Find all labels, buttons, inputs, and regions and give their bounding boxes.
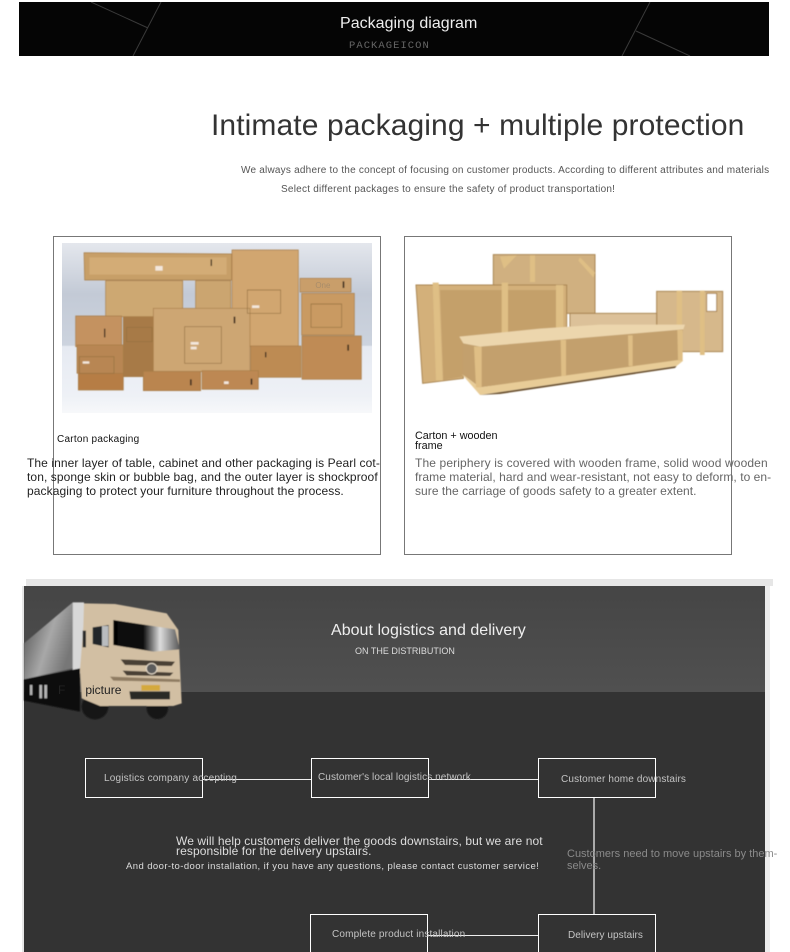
body text: carton packaging: ton, sponge skin or bubble bag, and the outer layer is shockproof <box>27 470 378 484</box>
image: carton boxes <box>62 243 372 412</box>
connector: second to third <box>428 779 538 780</box>
image: wooden crates <box>414 253 724 396</box>
label: carton packaging: Carton packaging <box>57 434 139 445</box>
step: local network <box>311 758 428 798</box>
logistics heading: About logistics and delivery <box>331 622 526 639</box>
panel: carton plus wooden frame <box>404 236 732 555</box>
upstairs note: selves. <box>567 860 601 872</box>
body text: carton plus wooden: sure the carriage of goods safety to a greater extent. <box>415 484 697 498</box>
upstairs note <box>567 848 777 872</box>
label: carton plus wooden: Carton + wooden <box>415 430 498 442</box>
panel: logistics and delivery <box>22 579 773 952</box>
panel: carton packaging <box>53 236 381 555</box>
main heading: Intimate packaging + multiple protection <box>211 109 744 142</box>
label: carton plus wooden <box>415 430 498 452</box>
step label: complete installation: Complete product installation <box>332 929 465 940</box>
image: delivery truck <box>23 602 182 720</box>
installation note: And door-to-door installation, if you have any questions, please contact customer service! <box>126 861 539 872</box>
delivery note: We will help customers deliver the goods downstairs, but we are not <box>176 834 543 848</box>
connector: first to second <box>202 779 311 780</box>
connector: third to fourth <box>593 798 595 914</box>
banner subtitle: PACKAGEICON <box>349 40 430 52</box>
connector: fourth to fifth <box>428 935 538 936</box>
delivery note: responsible for the delivery upstairs. <box>176 844 372 858</box>
step label: home downstairs: Customer home downstairs <box>561 774 686 785</box>
body text: carton plus wooden <box>415 456 771 498</box>
intro line two: Select different packages to ensure the safety of product transportation! <box>281 184 615 195</box>
step: home downstairs <box>538 758 656 798</box>
body text: carton packaging: packaging to protect your furniture throughout the process. <box>27 484 344 498</box>
step label: logistics company: Logistics company accepting <box>104 773 237 784</box>
label: carton plus wooden: frame <box>415 440 443 452</box>
body text: carton plus wooden: frame material, hard and wear-resistant, not easy to deform, to en- <box>415 470 771 484</box>
step label: delivery upstairs: Delivery upstairs <box>568 930 643 941</box>
body text: carton plus wooden: The periphery is covered with wooden frame, solid wood wooden <box>415 456 768 470</box>
delivery note <box>176 834 543 858</box>
step: complete installation <box>310 914 428 952</box>
banner title: Packaging diagram <box>340 15 477 32</box>
header banner <box>19 2 769 56</box>
logistics subheading: ON THE DISTRIBUTION <box>355 646 455 656</box>
step label: local network: Customer's local logistics network <box>318 772 471 783</box>
flow chart <box>85 758 777 952</box>
upstairs note: Customers need to move upstairs by them- <box>567 848 777 860</box>
intro line one: We always adhere to the concept of focusing on customer products. According to different attributes and materials <box>241 165 769 176</box>
step: logistics company <box>85 758 202 798</box>
truck caption: F picture <box>58 683 121 697</box>
image: carton boxes: One <box>315 281 331 290</box>
body text: carton packaging: The inner layer of table, cabinet and other packaging is Pearl cot- <box>27 456 380 470</box>
step: delivery upstairs <box>538 914 656 952</box>
body text: carton packaging <box>27 456 380 498</box>
